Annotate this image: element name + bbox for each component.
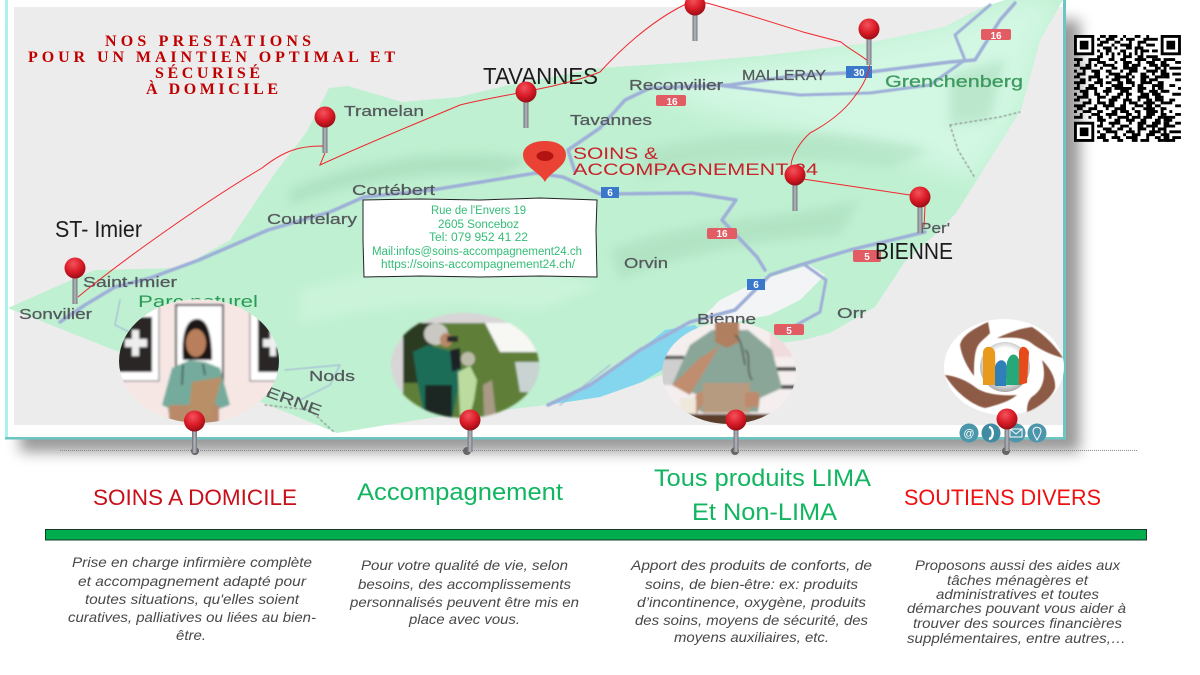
- map: roads: [60, 3, 1020, 433]
- map: place names: Reconvilier: [629, 77, 723, 94]
- text block: soins a domicile: curatives, palliatives ou liées au bien-: [68, 609, 316, 625]
- title: [28, 33, 395, 98]
- map: place names: Sonvilier: [19, 306, 92, 323]
- text block: soutiens divers: Proposons aussi des aides aux: [915, 557, 1121, 573]
- text block: produits: des soins, moyens de sécurité, des: [635, 612, 868, 628]
- text block: soins a domicile: être.: [176, 627, 206, 643]
- text block: accompagnement: besoins, des accomplissements: [358, 576, 571, 592]
- callout: contact address: https://soins-accompagnement24.ch/: [381, 259, 576, 271]
- photo: couple with binoculars: [391, 313, 539, 420]
- text block: accompagnement: [349, 557, 579, 627]
- map: place names: Tavannes: [570, 112, 652, 129]
- callout: contact address: Rue de l'Envers 19: [431, 205, 526, 217]
- green divider bar: [46, 530, 1146, 540]
- map: road shields: 5: [864, 252, 870, 263]
- icon: location marker: [523, 141, 566, 182]
- map: place names: Courtelary: [267, 211, 358, 228]
- text block: soins a domicile: Prise en charge infirmière complète: [72, 554, 312, 570]
- text block: soutiens divers: [907, 557, 1126, 646]
- icons: contact bubbles: @: [963, 428, 975, 440]
- callout: contact address: Mail:infos@soins-accompagnement24.ch: [372, 246, 582, 258]
- map: road shields: 16: [716, 229, 728, 240]
- text block: accompagnement: place avec vous.: [408, 611, 520, 627]
- text block: soutiens divers: trouver des sources financières: [913, 615, 1122, 631]
- heading: soins a domicile: SOINS A DOMICILE: [93, 485, 297, 510]
- heading: tous produits LIMA: [654, 465, 871, 526]
- map: place names: Nods: [309, 368, 355, 385]
- text block: soutiens divers: démarches pouvant vous aider à: [907, 600, 1126, 616]
- panel: map frame: [5, 0, 1080, 452]
- text block: soutiens divers: administratives et toutes: [936, 586, 1099, 602]
- title: NOS PRESTATIONS: [105, 33, 311, 50]
- text block: produits: d’incontinence, oxygène, produits: [637, 594, 866, 610]
- text block: soins a domicile: toutes situations, qu'elles soient: [85, 591, 300, 607]
- text block: produits: moyens auxiliaires, etc.: [674, 629, 829, 645]
- text block: soutiens divers: supplémentaires, entre autres,…: [907, 630, 1126, 646]
- map: place names: MALLERAY: [742, 67, 826, 84]
- map: place names: Orr: [837, 305, 866, 322]
- icons: contact bubbles: [960, 424, 1046, 442]
- photo: hands around a family: [944, 319, 1064, 415]
- callout: contact address: 2605 Sonceboz: [438, 219, 519, 231]
- route line: [78, 3, 925, 297]
- company label: soins et accompagnement: SOINS &: [573, 144, 659, 163]
- map: place names: Tramelan: [344, 103, 424, 120]
- map: place names: Cortébert: [352, 182, 436, 199]
- heading: accompagnement: Accompagnement: [357, 479, 563, 506]
- city labels: BIENNE: [875, 238, 953, 264]
- map: terrain: [0, 0, 1070, 440]
- text block: produits: Apport des produits de conforts, de: [630, 557, 872, 573]
- map: place names: Saint-Imier: [83, 274, 177, 291]
- company label: soins et accompagnement: ACCOMPAGNEMENT 24: [573, 160, 818, 179]
- map: road shields: [601, 29, 1011, 337]
- text block: accompagnement: personnalisés peuvent être mis en: [349, 594, 579, 610]
- title: À DOMICILE: [146, 79, 278, 98]
- map: place names: Parc naturel: [138, 292, 258, 311]
- text block: soins a domicile: et accompagnement adapté pour: [78, 573, 307, 589]
- photo: carer writing on a clipboard: [662, 322, 797, 426]
- timeline line: [60, 450, 1137, 452]
- text block: produits: soins, de bien-être: ex: produits: [645, 576, 858, 592]
- heading: tous produits LIMA: Et Non-LIMA: [692, 499, 837, 526]
- text block: produits: [630, 557, 872, 645]
- city labels: [55, 63, 953, 264]
- map: place names: [19, 67, 1023, 420]
- map: place names: ERNE: [264, 384, 324, 420]
- title: POUR UN MAINTIEN OPTIMAL ET: [28, 49, 395, 66]
- heading: soutiens divers: SOUTIENS DIVERS: [904, 485, 1101, 510]
- hands ring: [945, 322, 1063, 412]
- heading: tous produits LIMA: Tous produits LIMA: [654, 465, 871, 492]
- map: road shields: 5: [786, 326, 792, 337]
- callout: contact address: Tel: 079 952 41 22: [429, 232, 528, 244]
- city labels: ST- Imier: [55, 216, 142, 242]
- map: road shields: 6: [607, 188, 613, 199]
- map: place names: Orvin: [624, 255, 668, 272]
- timeline pins: [184, 408, 1018, 455]
- callout: contact address: [363, 198, 597, 277]
- title: SÉCURISÉ: [155, 63, 260, 82]
- text block: soutiens divers: tâches ménagères et: [947, 572, 1089, 588]
- QR code: [1074, 35, 1181, 142]
- map: place names: Grenchenberg: [885, 72, 1023, 91]
- map: road shields: 6: [753, 280, 759, 291]
- city labels: TAVANNES: [483, 63, 598, 89]
- text block: soins a domicile: [68, 554, 316, 643]
- map pins: [64, 0, 930, 304]
- photo: nurse holding a clipboard: [119, 299, 279, 423]
- map: road shields: 30: [853, 68, 865, 79]
- company label: soins et accompagnement: [573, 144, 818, 179]
- map: place names: Per': [920, 220, 950, 237]
- map: road shields: 16: [990, 31, 1002, 42]
- text block: accompagnement: Pour votre qualité de vie, selon: [361, 557, 568, 573]
- map: road shields: 16: [666, 97, 678, 108]
- map: place names: Bienne: [697, 311, 756, 328]
